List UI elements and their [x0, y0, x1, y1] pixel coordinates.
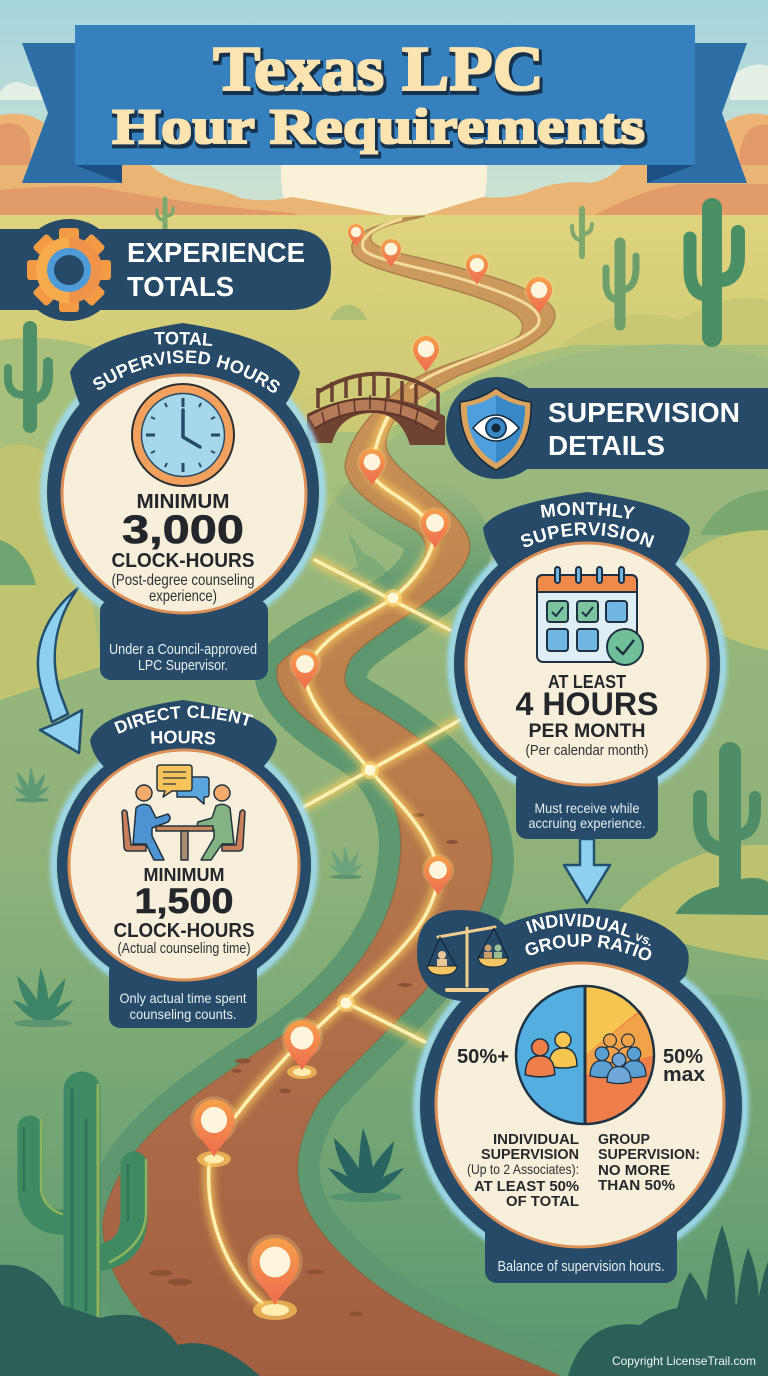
panel: direct client hours: CLOCK-HOURS [114, 920, 254, 942]
panel: monthly supervision: SUPERVISION [521, 522, 654, 548]
panel: total supervised hours: SUPERVISED HOURS [93, 350, 280, 393]
group column text: THAN 50% [598, 1178, 675, 1194]
panel: individual vs group ratio: max [663, 1064, 705, 1086]
stats text: AT LEAST [548, 672, 626, 692]
pie labels: 50%+ [457, 1046, 509, 1068]
panel: individual vs group ratio [410, 908, 752, 1283]
header badge [417, 908, 689, 1001]
header text: DIRECT CLIENT [114, 706, 254, 734]
title banner [22, 25, 747, 183]
icon: balance scales [427, 927, 508, 990]
panel: monthly supervision: PER MONTH [528, 721, 646, 742]
panel: total supervised hours [37, 323, 329, 680]
label line 2: DETAILS [548, 430, 665, 461]
panel: monthly supervision [444, 492, 730, 839]
individual column text: INDIVIDUAL [493, 1132, 579, 1148]
copyright: Copyright LicenseTrail.com [612, 1354, 756, 1368]
footer note card [109, 960, 257, 1028]
scenery cacti [8, 199, 755, 890]
panel: monthly supervision: (Per calendar month) [526, 742, 648, 759]
footer note card [485, 1220, 677, 1283]
header badge [483, 492, 690, 565]
label: SUPERVISION [548, 397, 740, 428]
panel: total supervised hours: 3,000 [122, 508, 244, 552]
panel: total supervised hours: CLOCK-HOURS [112, 550, 254, 572]
arrow: total to direct hours [38, 588, 82, 753]
panel: direct client hours: (Actual counseling time) [118, 940, 250, 957]
icon: shield with eye [460, 388, 531, 470]
foreground bushes [0, 1225, 768, 1376]
panel: monthly supervision: 4 HOURS [516, 686, 658, 722]
title text: Texas LPC [213, 33, 544, 104]
icon: group [590, 1034, 646, 1084]
header text: TOTAL [154, 332, 212, 346]
footer text: Must receive while [534, 800, 640, 816]
title text line 2: Hour Requirements [112, 98, 645, 154]
label: EXPERIENCE [127, 237, 305, 268]
icon: clock [132, 384, 234, 486]
panel: direct client hours [47, 700, 321, 1028]
section header: experience totals [0, 219, 331, 321]
group column text: NO MORE [598, 1163, 670, 1179]
section header: supervision details [446, 377, 768, 479]
header text: INDIVIDUAL vs. [526, 914, 651, 946]
winding road [103, 216, 560, 1376]
individual column text: SUPERVISION [481, 1147, 579, 1163]
footer note card [100, 600, 268, 680]
footer text: Balance of supervision hours. [498, 1259, 664, 1275]
footer text: Under a Council-approved [109, 642, 257, 658]
panel: total supervised hours: experience) [149, 588, 217, 605]
panel: direct client hours: counseling counts. [130, 1006, 236, 1022]
icon: wooden bridge [307, 374, 445, 445]
glowing route with connectors [209, 405, 460, 1303]
panel: total supervised hours: LPC Supervisor. [138, 658, 228, 674]
pie chart [516, 986, 654, 1124]
icon: calendar [537, 567, 643, 665]
header badge [70, 323, 300, 405]
route pins [190, 223, 554, 1320]
plants [13, 767, 404, 1202]
panel: individual vs group ratio: GROUP RATIO [525, 934, 652, 960]
arrow: monthly to ratio [564, 839, 610, 903]
individual column text: (Up to 2 Associates): [467, 1161, 579, 1177]
icon: two people at table [122, 765, 245, 860]
panel: direct client hours: HOURS [151, 730, 215, 744]
stats text: MINIMUM [136, 491, 230, 513]
individual column text: AT LEAST 50% [474, 1179, 579, 1195]
icon: individual pair [525, 1032, 577, 1077]
icon: gear [27, 228, 111, 312]
big foreground cactus [24, 1085, 146, 1340]
footer note card [516, 770, 658, 839]
header badge [90, 700, 277, 768]
individual column text: OF TOTAL [506, 1194, 579, 1210]
group column text: SUPERVISION: [598, 1147, 700, 1163]
individual column text [467, 1132, 579, 1210]
panel: direct client hours: 1,500 [134, 882, 234, 921]
panel: individual vs group ratio: 50% [663, 1046, 703, 1068]
group column text [598, 1132, 700, 1194]
panel: total supervised hours: (Post-degree counseling [112, 572, 254, 589]
header text: MONTHLY [540, 502, 636, 519]
group column text: GROUP [598, 1132, 650, 1148]
panel: monthly supervision: accruing experience. [528, 815, 646, 831]
footer text: Only actual time spent [120, 990, 247, 1006]
label line 2: TOTALS [127, 271, 234, 302]
stats text: MINIMUM [144, 865, 224, 885]
